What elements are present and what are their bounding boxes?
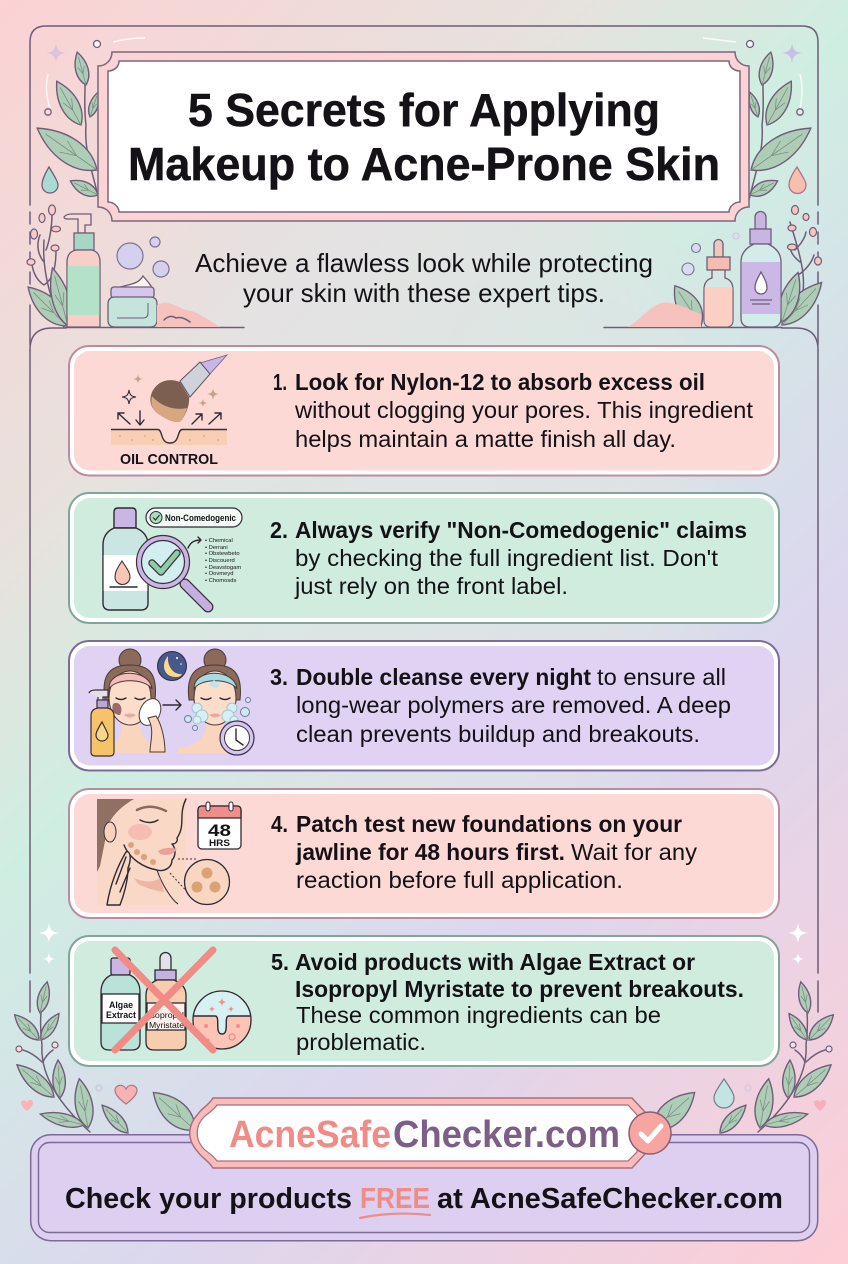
calendar 48 hrs: 48	[208, 821, 231, 840]
cream jar	[108, 276, 157, 327]
subtitle	[195, 248, 653, 308]
card 1 text: helps maintain a matte finish all day.	[295, 426, 676, 452]
small dropper bottle	[704, 240, 733, 327]
ingredient list: • Deavstogam	[205, 565, 241, 571]
ingredient list: • Discouerd	[205, 558, 235, 564]
decoration: hearts and drop at the bottom	[21, 1079, 826, 1111]
website name: AcneSafe	[229, 1114, 391, 1156]
oil bottle	[89, 690, 114, 756]
card 2 text: Always verify "Non-Comedogenic" claims	[295, 517, 747, 543]
ingredient list: • Oovmeyd	[205, 571, 233, 577]
title: 5 Secrets for Applying	[188, 84, 660, 136]
bottle labels: Isopropyl	[148, 1010, 184, 1020]
icon: double cleansing faces	[89, 649, 254, 756]
ingredient list: • Chemical	[205, 538, 233, 544]
card 5 text	[271, 949, 744, 1055]
card 2 text: by checking the full ingredient list. Don't	[295, 545, 719, 571]
bottle labels: Algae	[109, 1000, 133, 1011]
decoration: bottom-right leaves	[645, 981, 838, 1138]
powder heap	[157, 303, 220, 327]
card 5 text: 5.	[271, 949, 289, 975]
card 2 text: just rely on the front label.	[294, 573, 568, 599]
card 3 text: clean prevents buildup and breakouts.	[296, 721, 700, 747]
website name	[229, 1114, 620, 1156]
card 2 text: 2.	[270, 517, 288, 543]
decoration: bottom-left leaves	[10, 981, 203, 1138]
card 1 text: Look for Nylon-12 to absorb excess oil	[295, 369, 705, 395]
card 1 text: without clogging your pores. This ingredient	[294, 397, 754, 423]
bottle labels	[106, 1000, 184, 1030]
illustration: left skincare products	[21, 205, 220, 333]
non-comedogenic badge: Non-Comedogenic	[165, 513, 236, 523]
icon label: OIL CONTROL	[120, 451, 218, 468]
ingredient list: • Derrani	[205, 545, 228, 551]
face illustration	[97, 799, 186, 905]
call to action text	[65, 1183, 783, 1218]
icon: patch test on jawline	[97, 799, 241, 905]
card 5 text: These common ingredients can be	[296, 1002, 661, 1028]
card 4 text: reaction before full application.	[296, 867, 623, 893]
bottle labels: Extract	[106, 1010, 137, 1021]
card 2: non-comedogenic	[69, 493, 779, 623]
pump bottle	[64, 214, 100, 327]
panel frame: tips	[30, 328, 818, 1012]
call to action text: FREE	[360, 1183, 430, 1215]
bubbles	[682, 233, 739, 275]
card 4 text: jawline for 48 hours first.	[295, 839, 565, 865]
left face	[104, 649, 168, 753]
icon: bottle and magnifier	[103, 508, 242, 610]
title	[128, 84, 720, 190]
large dropper bottle	[741, 212, 781, 327]
icon: makeup brush over skin	[111, 355, 227, 468]
card 4: patch test	[69, 789, 779, 918]
call to action text: Check your products	[65, 1183, 352, 1215]
illustration: right skincare products	[628, 206, 829, 332]
card 3 text	[270, 664, 731, 747]
website plaque	[190, 1098, 671, 1168]
calendar 48 hrs: HRS	[209, 838, 230, 848]
card 2 text	[270, 517, 747, 599]
title plaque	[98, 52, 749, 221]
subtitle: Achieve a flawless look while protecting	[195, 248, 653, 278]
ingredient list	[188, 537, 241, 584]
title: Makeup to Acne-Prone Skin	[128, 138, 720, 190]
arrow	[163, 700, 181, 710]
card 5 text: Isopropyl Myristate to prevent breakouts.	[295, 976, 744, 1002]
ingredient list: • Obstewbeto	[205, 551, 240, 557]
skin close-up	[170, 859, 230, 904]
decoration: top-left leaves	[30, 51, 104, 201]
card 4 text: 4.	[271, 811, 288, 837]
red cross	[115, 950, 213, 1050]
card 3: double cleanse	[69, 641, 779, 770]
check badge	[629, 1112, 671, 1154]
card 4 text	[271, 811, 698, 893]
card 1 text: 1.	[273, 369, 287, 395]
decoration: top-right leaves	[744, 51, 818, 201]
call to action text: at AcneSafeChecker.com	[437, 1183, 783, 1215]
decoration: sparkles, circles and drops at top	[42, 38, 806, 194]
outer frame	[30, 26, 818, 345]
moon badge	[158, 652, 186, 680]
right face	[178, 649, 250, 753]
bottle labels: Myristate	[149, 1020, 184, 1030]
calendar 48 hrs	[198, 802, 241, 849]
card 3 text: 3.	[270, 664, 288, 690]
powder heap	[628, 302, 701, 327]
subtitle: your skin with these expert tips.	[243, 278, 605, 308]
clock	[220, 721, 254, 755]
call to action panel	[31, 1135, 818, 1241]
card 3 text: to ensure all	[597, 664, 726, 690]
card 4 text: Wait for any	[571, 839, 698, 865]
card 1: oil control	[69, 346, 779, 476]
card 5 text: problematic.	[296, 1029, 426, 1055]
card 5 text: Avoid products with Algae Extract or	[295, 949, 695, 975]
card 4 text: Patch test new foundations on your	[296, 811, 682, 837]
card 5: avoid ingredients	[69, 936, 779, 1066]
ingredient list: • Chomosds	[205, 578, 236, 584]
decoration: sparkles beside card 5	[39, 923, 808, 965]
skin diagram	[193, 991, 251, 1049]
bubbles	[117, 237, 169, 277]
card 3 text: long-wear polymers are removed. A deep	[296, 692, 731, 718]
card 1 text	[273, 369, 754, 452]
icon: crossed out products	[101, 950, 251, 1050]
card 3 text: Double cleanse every night	[296, 664, 591, 690]
website name: Checker.com	[393, 1114, 620, 1156]
